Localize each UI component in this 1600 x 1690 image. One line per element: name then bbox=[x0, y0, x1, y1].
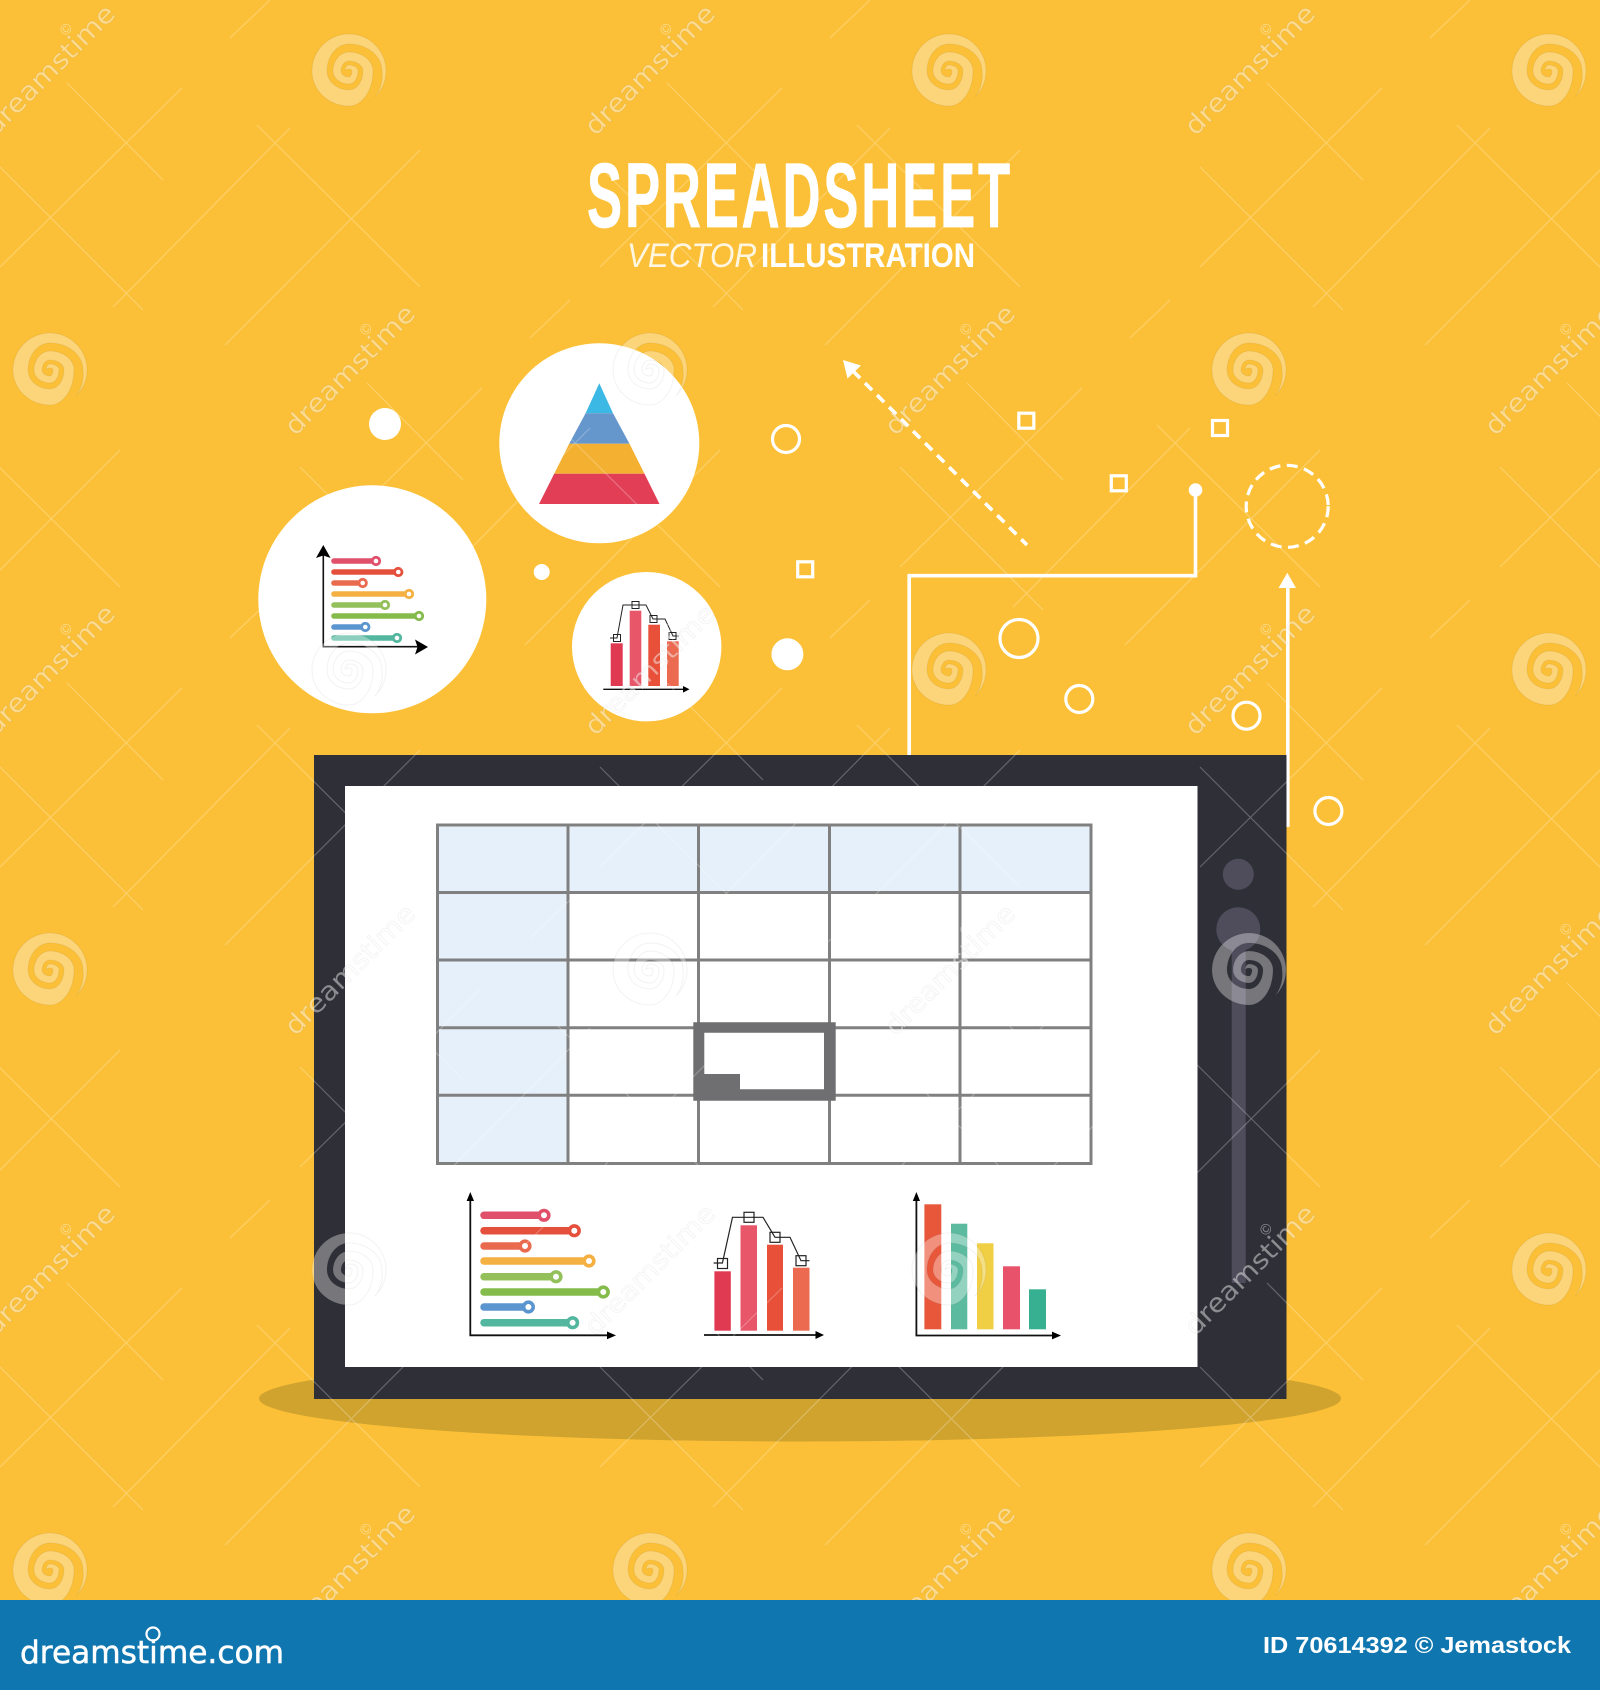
decorative dots and shapes bbox=[369, 408, 1342, 824]
axis bbox=[603, 686, 690, 693]
hollow circle bbox=[1315, 798, 1342, 824]
hollow circle bbox=[1066, 686, 1093, 712]
bubble: pyramid chart bbox=[499, 343, 699, 543]
hollow circle bbox=[1233, 702, 1260, 729]
chart bars bbox=[334, 557, 423, 642]
footer credit: ID 70614392 © Jemastock bbox=[1263, 1632, 1572, 1658]
dot bbox=[369, 408, 401, 440]
grid lines bbox=[438, 825, 1091, 1164]
footer logo: dreamstime.com bbox=[20, 1635, 284, 1671]
dot bbox=[771, 638, 803, 670]
tablet button bbox=[1223, 859, 1254, 890]
dashed circle bbox=[1246, 465, 1328, 547]
footer bar bbox=[0, 1600, 1600, 1690]
bubble: column chart with curve bbox=[572, 572, 721, 721]
pyramid layer blue bbox=[586, 383, 613, 413]
square bbox=[1111, 476, 1126, 491]
pyramid layer steel blue bbox=[569, 413, 630, 444]
tablet home button bbox=[1216, 907, 1260, 951]
dot bbox=[534, 564, 550, 580]
shadow under tablet bbox=[259, 1356, 1341, 1442]
pyramid layer red bbox=[539, 474, 660, 504]
chart: descending columns bbox=[913, 1192, 1061, 1339]
spreadsheet table bbox=[437, 824, 1091, 1164]
subtitle: illustration: ILLUSTRATION bbox=[761, 237, 975, 275]
pyramid layer amber bbox=[554, 444, 644, 474]
heading: spreadsheet: SPREADSHEET bbox=[587, 145, 1013, 247]
tablet bbox=[314, 755, 1286, 1399]
arrow: upward bbox=[1279, 573, 1296, 827]
tablet body bbox=[314, 755, 1286, 1399]
chart: horizontal bars bbox=[467, 1192, 616, 1339]
square bbox=[1212, 420, 1228, 436]
selected cell bbox=[693, 1022, 836, 1101]
header shading bbox=[437, 824, 1091, 1163]
hollow circle bbox=[772, 426, 800, 452]
hollow circle bbox=[1000, 620, 1038, 658]
circuit line bbox=[909, 483, 1202, 756]
tablet slider bbox=[1232, 930, 1246, 1283]
chart bars bbox=[611, 611, 679, 686]
bubble: horizontal bar chart bbox=[258, 485, 486, 713]
arrow: dashed diagonal bbox=[843, 360, 1027, 545]
square bbox=[1019, 413, 1034, 428]
tablet screen bbox=[345, 786, 1198, 1367]
trend line bbox=[610, 602, 679, 642]
subtitle: vector: VECTOR bbox=[627, 237, 757, 275]
title bbox=[587, 145, 1013, 275]
chart axes bbox=[316, 545, 428, 654]
chart: columns with trend line bbox=[704, 1212, 824, 1339]
square bbox=[798, 562, 813, 577]
